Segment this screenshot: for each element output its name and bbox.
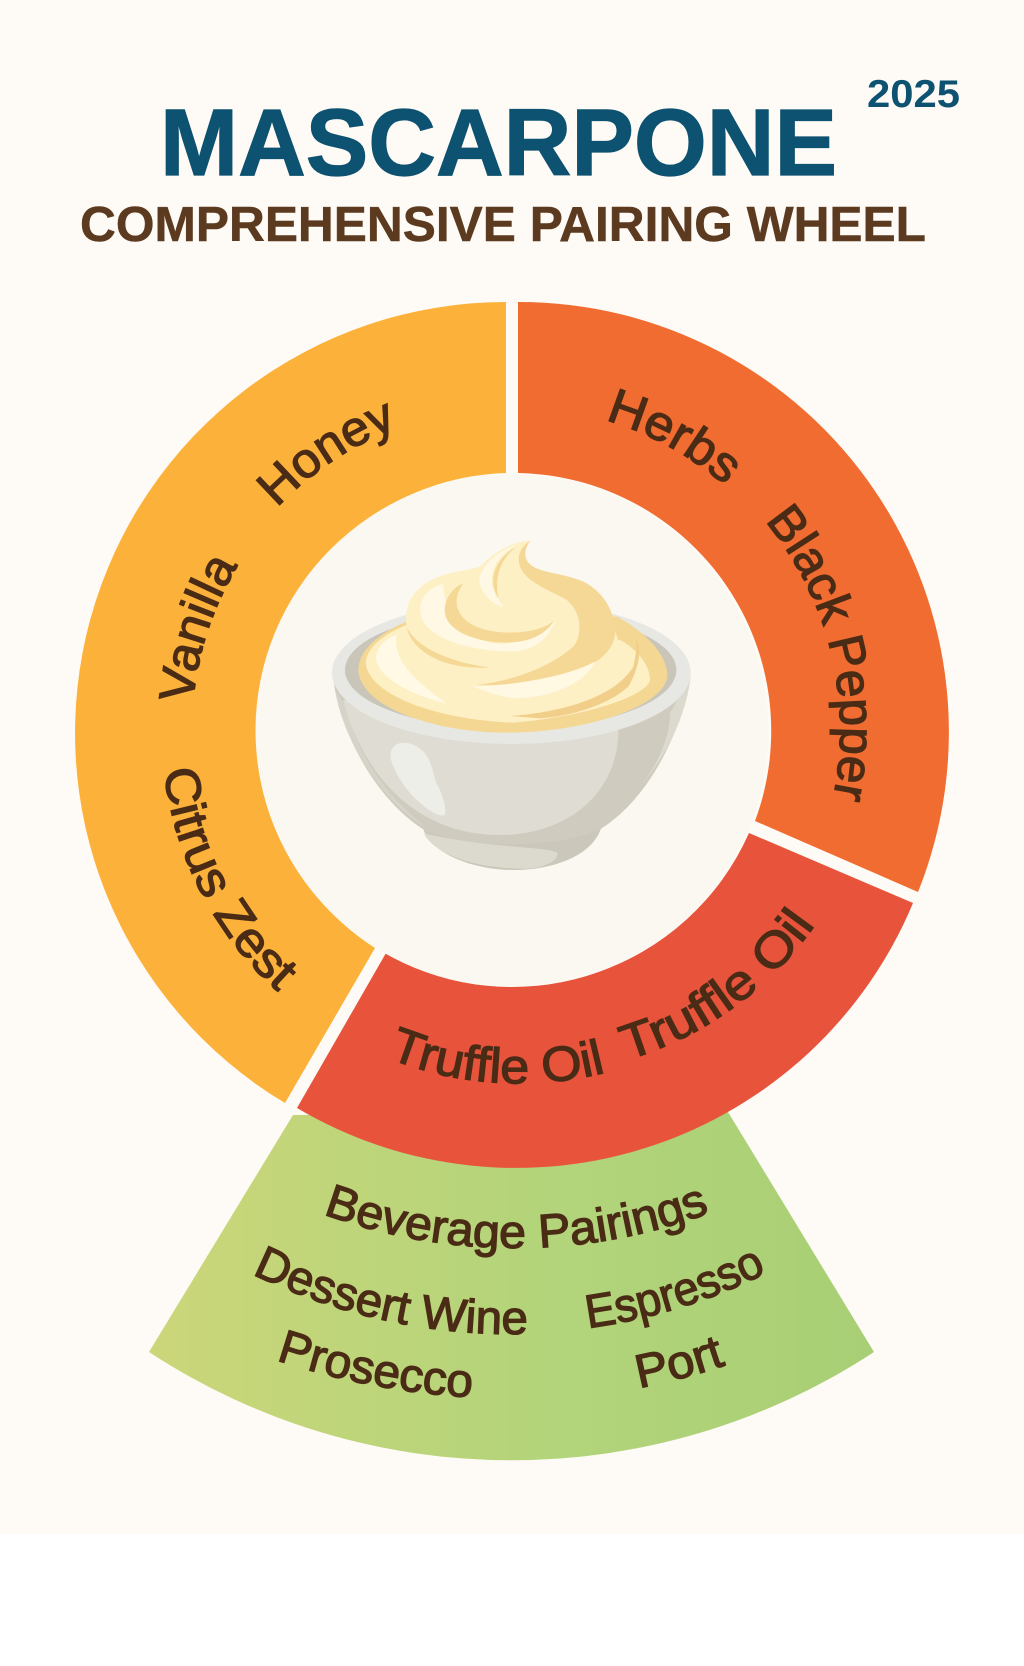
header <box>80 73 960 252</box>
green segment <box>149 1112 874 1460</box>
amber segment <box>75 302 506 1103</box>
icon: bowl of mascarpone <box>332 541 691 870</box>
panel: savory pairings segment <box>518 302 949 892</box>
label: Truffle Oil left: Truffle Oil <box>398 1026 604 1084</box>
title: MASCARPONE <box>160 90 837 196</box>
wheel centre circle <box>256 474 768 987</box>
label: Honey: Honey <box>256 402 388 506</box>
panel: beverage pairings <box>149 1112 874 1460</box>
label: Truffle Oil right: Truffle Oil <box>616 906 814 1056</box>
label: Espresso: Espresso <box>586 1253 762 1328</box>
label: Citrus Zest: Citrus Zest <box>165 768 296 992</box>
label: Beverage Pairings: Beverage Pairings <box>326 1184 708 1258</box>
subtitle: COMPREHENSIVE PAIRING WHEEL <box>80 198 926 252</box>
label: Prosecco: Prosecco <box>278 1330 472 1398</box>
label: Herbs: Herbs <box>608 388 738 482</box>
orange segment <box>518 302 949 892</box>
panel: sweet pairings segment <box>75 302 506 1103</box>
year label: 2025 <box>867 73 960 116</box>
label: Port: Port <box>635 1337 726 1388</box>
panel: truffle segment <box>297 833 913 1168</box>
label: Black Pepper: Black Pepper <box>766 502 867 803</box>
label: Vanilla: Vanilla <box>158 558 238 700</box>
red segment <box>297 833 913 1168</box>
label: Dessert Wine: Dessert Wine <box>254 1246 526 1335</box>
